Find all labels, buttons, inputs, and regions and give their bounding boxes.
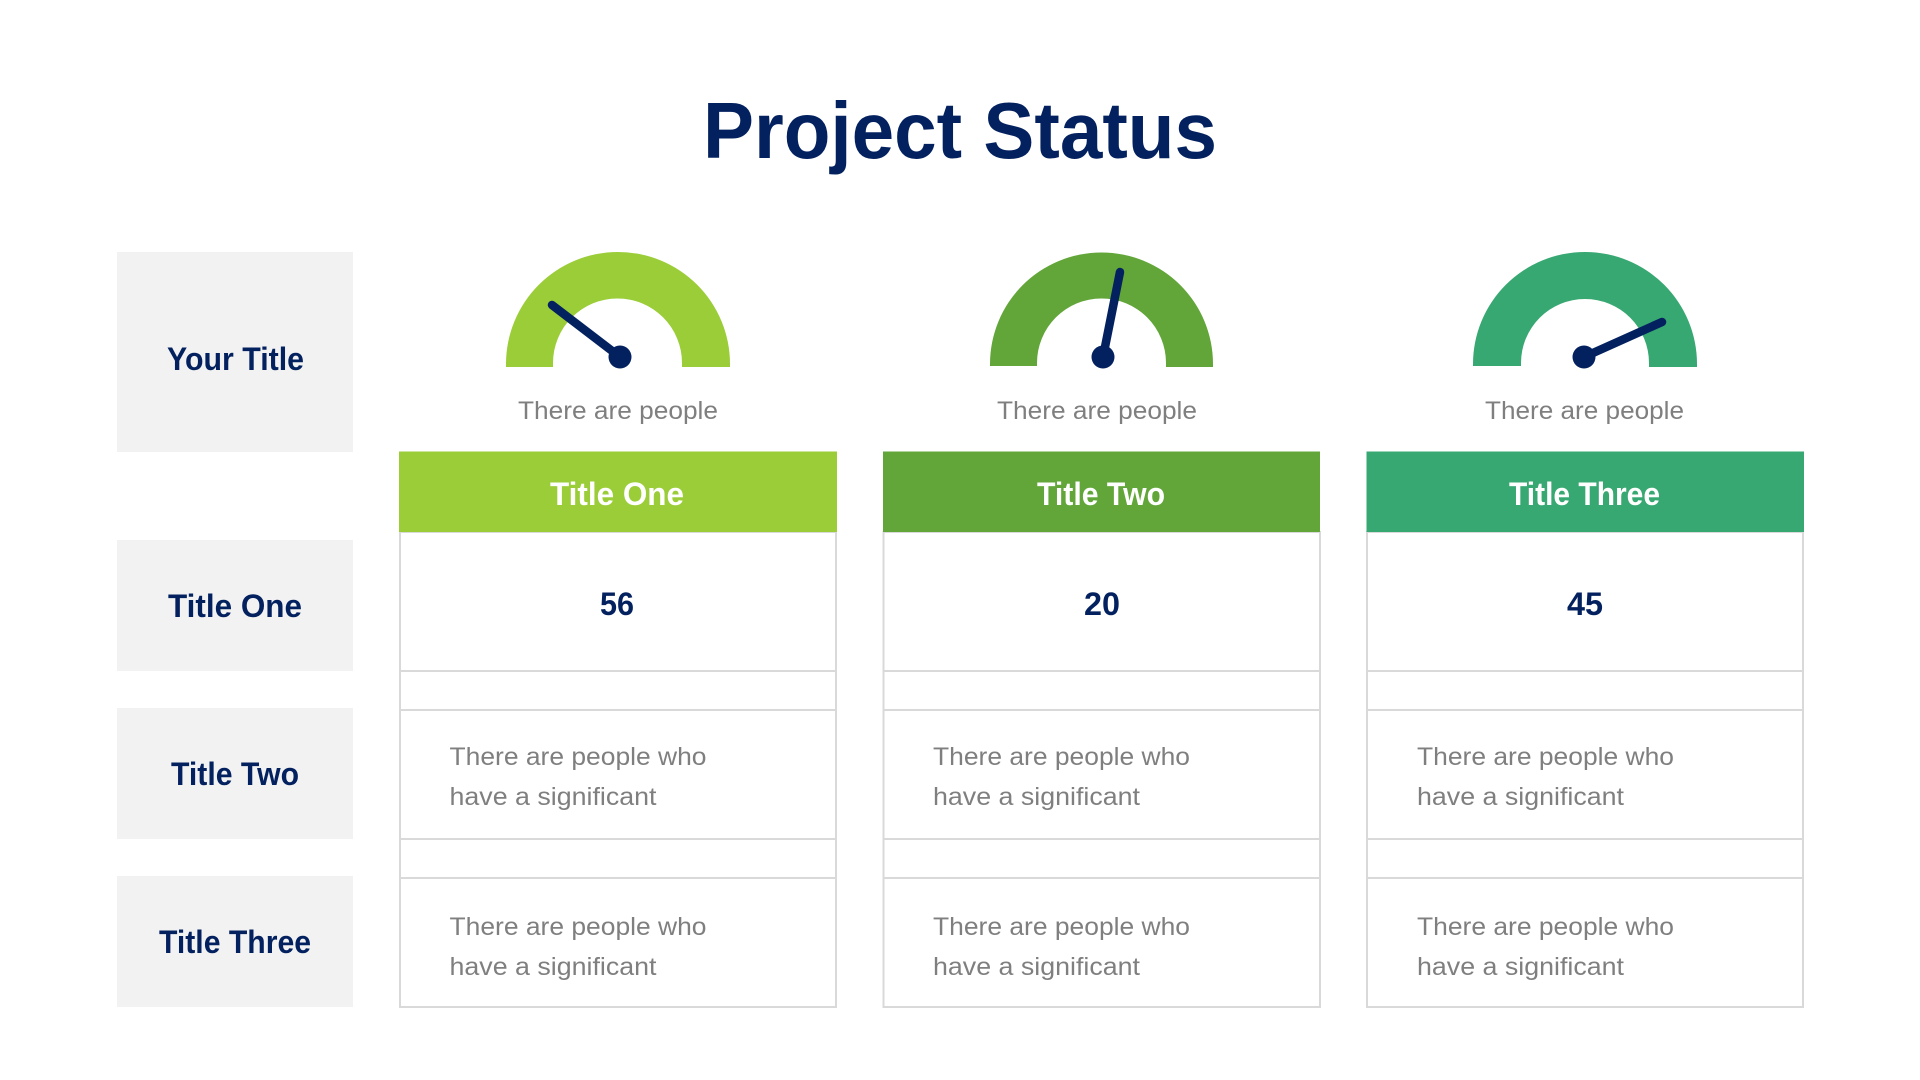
column header — [883, 452, 1320, 532]
value: 20 — [1084, 586, 1120, 622]
text block: row three: have a significant — [450, 953, 657, 981]
title: Project Status — [703, 86, 1217, 175]
text block: row three — [1417, 913, 1674, 981]
column header — [399, 452, 837, 532]
text block: row three: There are people who — [933, 913, 1190, 941]
text block: row three: have a significant — [933, 953, 1140, 981]
column header: Title Two — [1037, 476, 1165, 512]
gauge caption: column three: There are people — [1485, 397, 1684, 425]
text block: row three: There are people who — [450, 913, 706, 941]
text block: row two: There are people who — [450, 743, 706, 771]
row label panel: Title Three — [117, 876, 353, 1007]
text block: row two: have a significant — [933, 783, 1140, 811]
value: 45 — [1567, 586, 1603, 622]
table column: Title Three — [1366, 452, 1804, 1007]
gauge: column two — [990, 252, 1213, 368]
gauge: column three — [1473, 252, 1697, 368]
text block: row three — [933, 913, 1190, 981]
table column: Title One — [399, 452, 837, 1007]
text block: row two: have a significant — [450, 783, 657, 811]
row label panel: Title One — [117, 540, 353, 671]
row label panel: Title One: Title One — [168, 588, 302, 624]
row label panel: Title Three: Title Three — [159, 924, 311, 960]
text block: row two: There are people who — [1417, 743, 1674, 771]
row label panel: Your Title — [117, 252, 353, 452]
text block: row three: have a significant — [1417, 953, 1624, 981]
value: 56 — [600, 586, 634, 622]
gauge: column one — [506, 252, 730, 368]
column header: Title One — [550, 476, 684, 512]
text block: row three — [450, 913, 706, 981]
text block: row two: have a significant — [1417, 783, 1624, 811]
text block: row two — [933, 743, 1190, 811]
text block: row two: There are people who — [933, 743, 1190, 771]
row label panel: Title Two: Title Two — [171, 756, 299, 792]
table column: Title Two — [883, 452, 1320, 1007]
gauge caption: column one: There are people — [518, 397, 718, 425]
row label panel: Your Title: Your Title — [167, 341, 304, 377]
column header — [1366, 452, 1804, 532]
text block: row three: There are people who — [1417, 913, 1674, 941]
text block: row two — [450, 743, 706, 811]
text block: row two — [1417, 743, 1674, 811]
column header: Title Three — [1509, 476, 1660, 512]
row label panel: Title Two — [117, 708, 353, 839]
gauge caption: column two: There are people — [997, 397, 1197, 425]
